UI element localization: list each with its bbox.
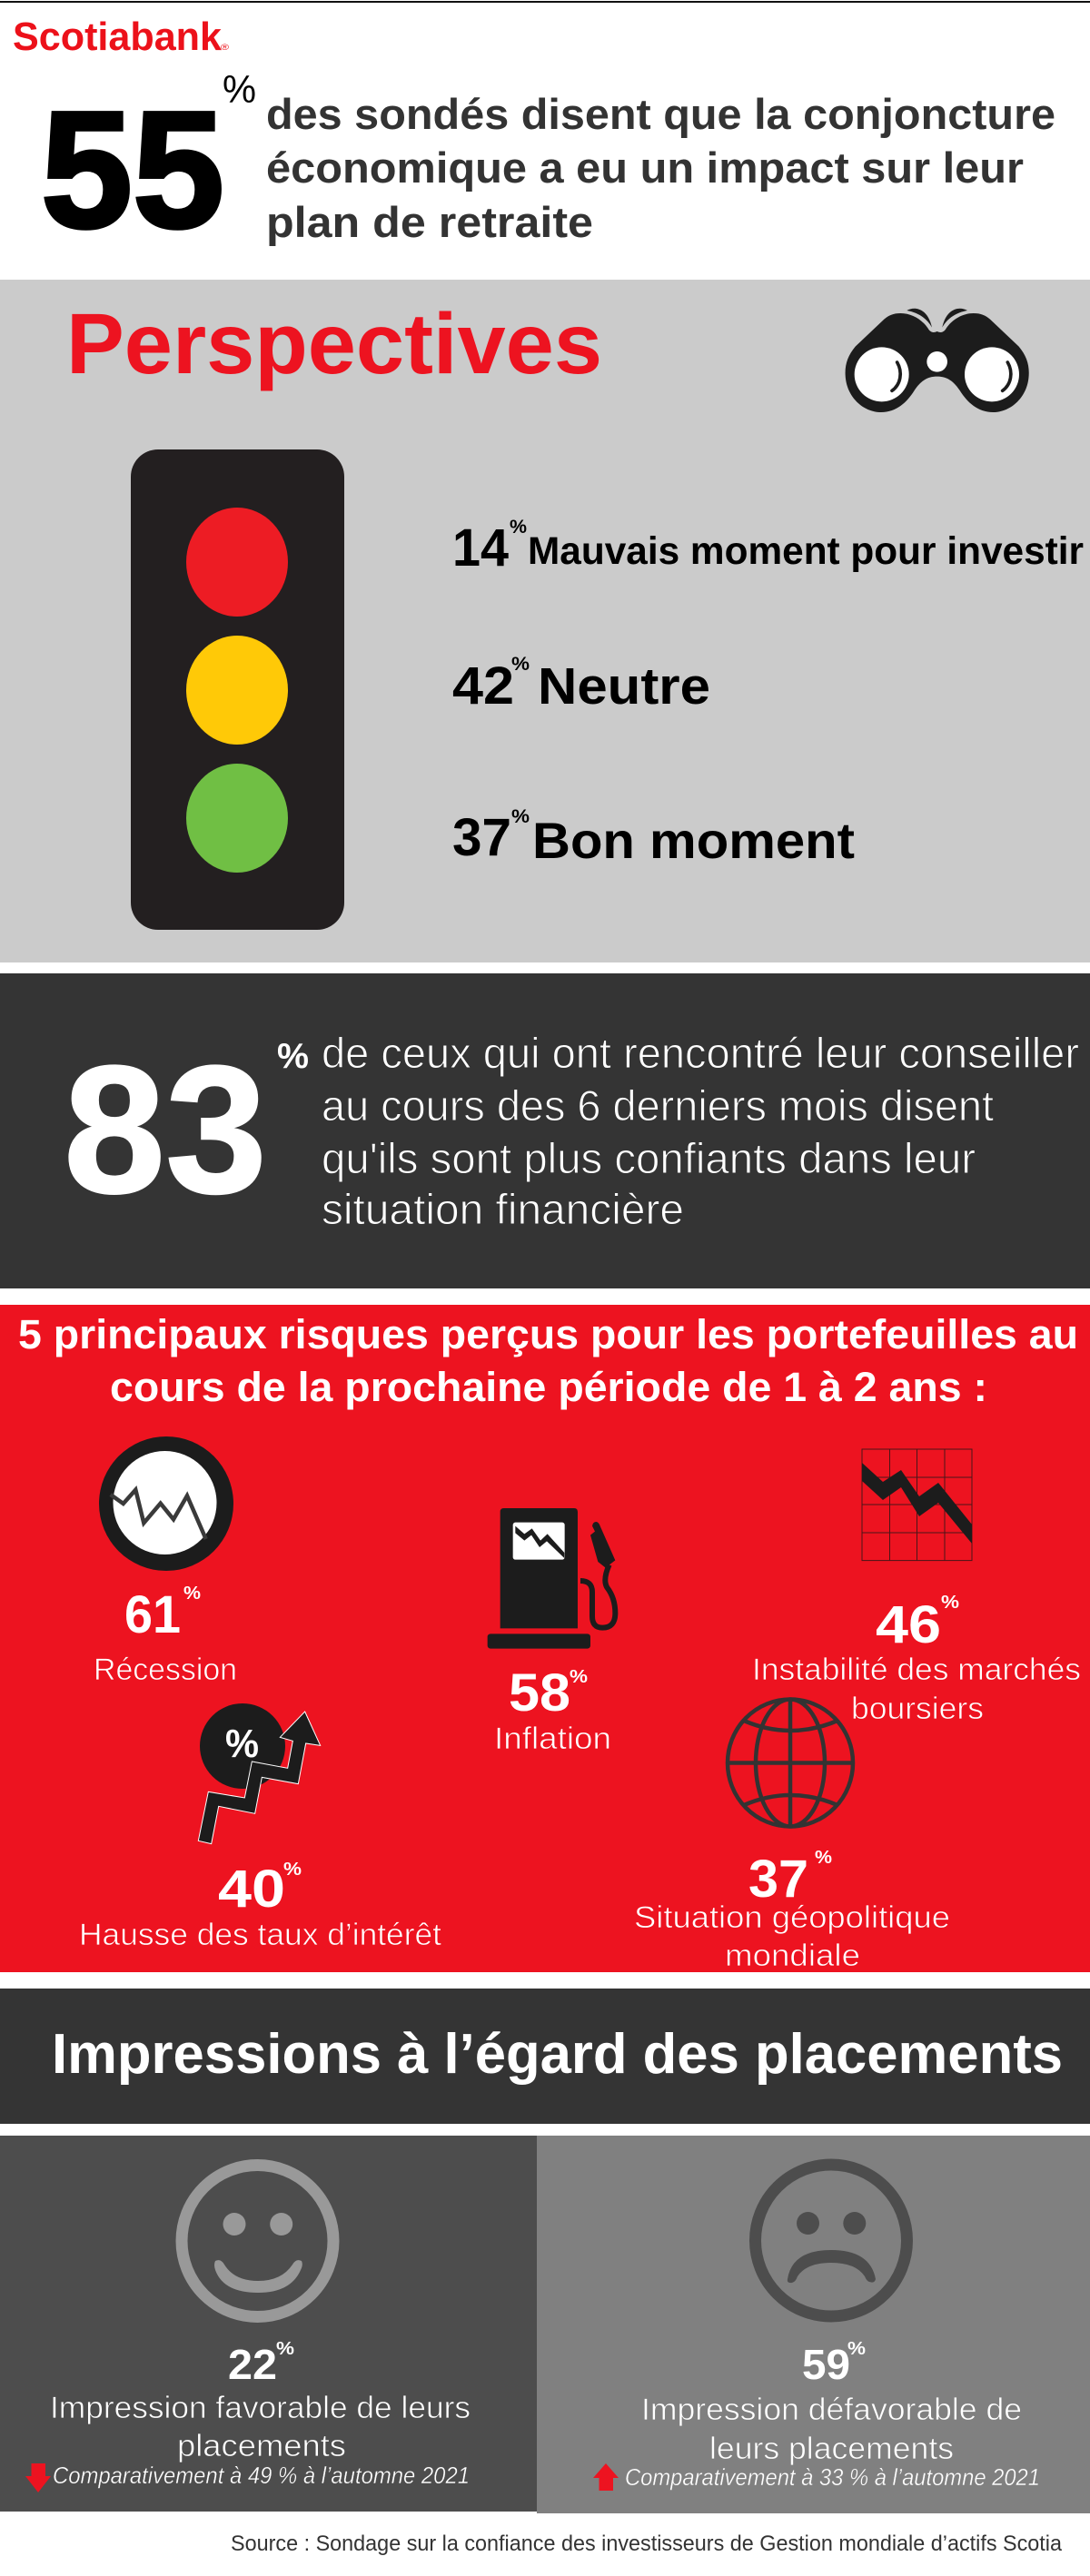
headline text: économique a eu un impact sur leur	[266, 143, 1024, 192]
text: favourable label	[50, 2391, 471, 2463]
icon: smiley face	[182, 2165, 333, 2317]
banner: impressions heading	[0, 1989, 1090, 2124]
stat: interest rates 40 percent: Hausse des taux d’intérêt	[79, 1918, 442, 1952]
text: favourable label: Impression favorable de leurs	[50, 2391, 471, 2425]
panel: perspectives	[0, 280, 1090, 962]
panel: 83 percent advisor	[0, 973, 1090, 1288]
stat: recession 61 percent: Récession	[94, 1653, 237, 1687]
stat: 42 percent neutral	[452, 654, 710, 716]
text: unfavourable label	[641, 2393, 1022, 2466]
stat: recession 61 percent: %	[183, 1584, 201, 1604]
heading: Perspectives: Perspectives	[66, 296, 602, 392]
icon: falling market chart	[862, 1449, 972, 1561]
stat: 37 percent good time: %	[511, 806, 530, 827]
advisor text: qu'ils sont plus confiants dans leur	[322, 1134, 976, 1182]
stat: geopolitical 37 percent	[634, 1848, 950, 1973]
stat: geopolitical 37 percent: 37	[748, 1850, 808, 1909]
icon: rising interest rate arrow	[198, 1703, 321, 1844]
stat: 42 percent neutral: %	[511, 654, 530, 675]
stat: 37 percent good time: Bon moment	[532, 812, 855, 869]
icon: recession gauge	[99, 1436, 233, 1571]
text: favourable label: placements	[177, 2429, 346, 2463]
text: comparison autumn 2021: Comparativement à 33 % à l’automne 2021	[625, 2463, 1040, 2491]
percent sign: %	[223, 68, 256, 112]
advisor text	[322, 1029, 1079, 1233]
stat: inflation 58 percent: Inflation	[494, 1722, 611, 1756]
stat: inflation 58 percent	[494, 1663, 611, 1756]
percent sign: %	[277, 1037, 309, 1076]
headline text: plan de retraite	[266, 198, 593, 246]
stat: geopolitical 37 percent: Situation géopolitique	[634, 1900, 950, 1935]
stat: interest rates 40 percent: 40	[218, 1860, 285, 1919]
headline text: des sondés disent que la conjoncture	[266, 90, 1055, 138]
stat: 14 percent bad time: 14	[452, 518, 509, 577]
text: unfavourable label: Impression défavorable de	[641, 2393, 1022, 2427]
stat: 42 percent neutral: 42	[452, 656, 514, 716]
stat: interest rates 40 percent	[79, 1860, 442, 1952]
source note: Source : Sondage sur la confiance des investisseurs de Gestion mondiale d’actifs Scotia	[231, 2532, 1063, 2556]
stat: recession 61 percent: 61	[124, 1585, 181, 1644]
icon: gas pump	[488, 1508, 615, 1649]
heading: risks: cours de la prochaine période de 1 à 2 ans :	[110, 1364, 987, 1410]
stat: geopolitical 37 percent: mondiale	[725, 1939, 860, 1973]
advisor text: situation financière	[322, 1185, 684, 1233]
stat: recession 61 percent	[94, 1584, 237, 1687]
logo: Scotiabank: ®	[221, 43, 229, 52]
stat: 14 percent bad time: Mauvais moment pour investir	[528, 529, 1084, 573]
icon: traffic light	[131, 449, 344, 930]
stat: interest rates 40 percent: %	[283, 1860, 302, 1880]
stat: inflation 58 percent: %	[570, 1667, 588, 1687]
stat: market instability 46 percent: 46	[876, 1595, 941, 1654]
icon: rising interest rate arrow: %	[225, 1722, 259, 1766]
icon: red down arrow	[25, 2463, 51, 2492]
heading: risks: 5 principaux risques perçus pour les portefeuilles au	[18, 1311, 1078, 1357]
stat: 14 percent bad time	[452, 517, 1084, 577]
panel: favourable impression	[0, 2136, 537, 2512]
icon: red up arrow	[593, 2463, 619, 2491]
stat: market instability 46 percent: Instabilité des marchés	[752, 1653, 1081, 1687]
stat: inflation 58 percent: 58	[509, 1663, 570, 1722]
icon: binoculars	[846, 309, 1029, 412]
heading: risks	[18, 1311, 1078, 1410]
stat: 22 percent	[228, 2339, 294, 2388]
icon: globe	[728, 1699, 853, 1827]
panel: unfavourable impression	[537, 2136, 1090, 2513]
panel: top 5 risks	[0, 1305, 1090, 1973]
icon: sad face	[756, 2165, 907, 2316]
stat: geopolitical 37 percent: %	[815, 1848, 832, 1868]
stat: 37 percent good time: 37	[452, 808, 511, 867]
banner: impressions heading: Impressions à l’égard des placements	[52, 2023, 1063, 2086]
stat: 22 percent: 22	[228, 2341, 277, 2388]
text: comparison autumn 2021: Comparativement à 49 % à l’automne 2021	[53, 2462, 470, 2489]
stat: 59 percent: %	[847, 2339, 866, 2359]
stat: 22 percent: %	[276, 2339, 294, 2359]
logo: Scotiabank: Scotiabank	[13, 15, 223, 59]
stat: market instability 46 percent: %	[941, 1593, 959, 1613]
big number 83: 83	[64, 1029, 267, 1231]
stat: 42 percent neutral: Neutre	[538, 657, 710, 716]
headline stat: 55 percent	[41, 68, 1055, 262]
stat: 59 percent: 59	[802, 2341, 850, 2388]
stat: market instability 46 percent	[752, 1593, 1081, 1726]
headline text	[266, 90, 1055, 246]
stat: 14 percent bad time: %	[510, 517, 527, 538]
advisor text: au cours des 6 derniers mois disent	[322, 1081, 994, 1130]
big number 55: 55	[41, 76, 224, 262]
text: unfavourable label: leurs placements	[709, 2432, 954, 2466]
advisor text: de ceux qui ont rencontré leur conseiller	[322, 1029, 1079, 1077]
stat: market instability 46 percent: boursiers	[851, 1692, 984, 1726]
